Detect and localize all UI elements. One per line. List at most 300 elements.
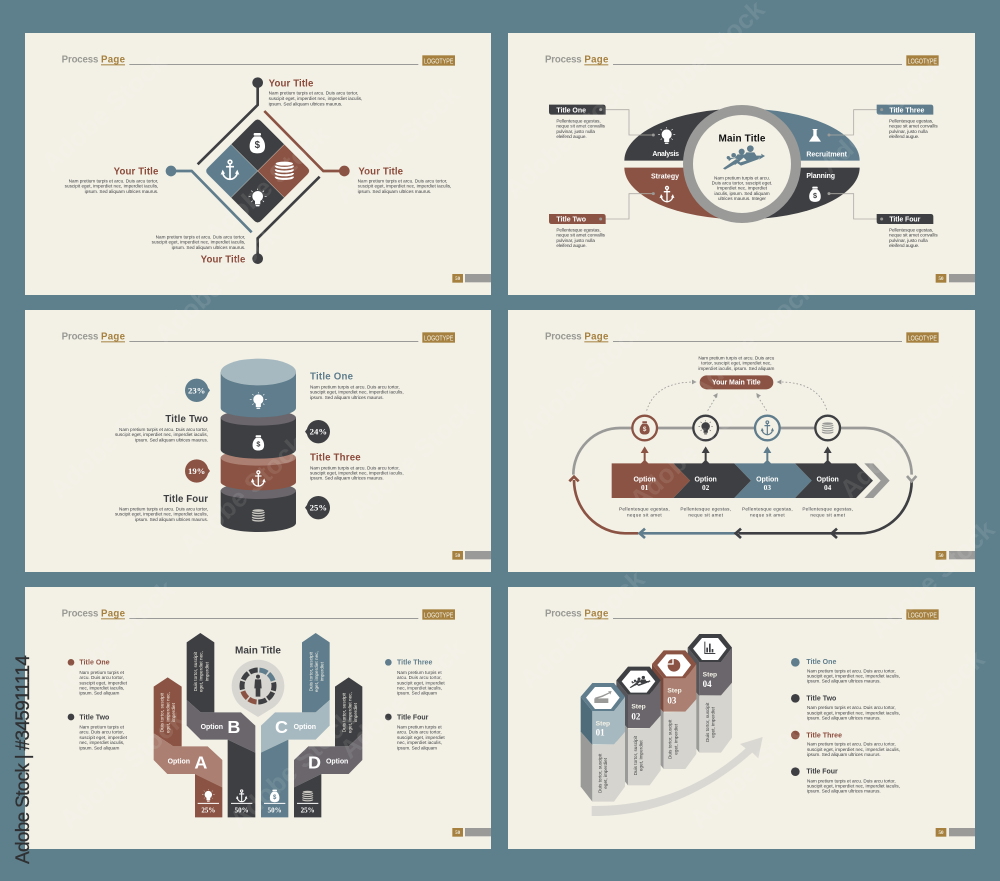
text block: title one: Title One (310, 372, 354, 383)
text block: title two (115, 414, 208, 442)
badge: 23% (185, 379, 210, 402)
label: title two: Title Two (556, 217, 586, 224)
legend: title two: ipsum. Sed aliquam ultrices maurus. (807, 715, 881, 720)
arrow D (294, 677, 362, 817)
diagram: hexagon steps (581, 634, 900, 816)
text block: title three: ipsum. Sed aliquam ultrices maurus. (310, 476, 384, 481)
watermark: Adobe Stock (854, 644, 991, 774)
legend: title four (791, 767, 900, 793)
header: process page: 50 (939, 277, 944, 282)
watermark: Adobe Stock (864, 514, 1000, 644)
center text (712, 175, 772, 201)
step 04 column: Step (703, 671, 717, 678)
legend: title one: Nam pretium turpis et (79, 670, 125, 675)
text block: title two: ipsum. Sed aliquam ultrices maurus. (135, 437, 208, 442)
text block: top: Your Title (269, 79, 314, 90)
watermark: Adobe Stock (334, 634, 471, 764)
header: process page: LOGOTYPE (908, 610, 937, 619)
legend: title two (791, 694, 900, 720)
watermark: Adobe Stock (814, 49, 951, 179)
icon: flask (809, 129, 821, 142)
header: process page: Process (62, 609, 98, 620)
badge: 19%: 19% (188, 466, 205, 476)
connectors (601, 110, 882, 219)
legend: title two: Title Two (806, 696, 836, 703)
panel: diamond four titles (25, 33, 491, 295)
step 01 column (581, 683, 625, 802)
text block: bottom: Nam pretium turpis et arcu. Duis arcu tortor, (156, 235, 245, 240)
label: title four: eleifend augue. (889, 243, 919, 248)
legend: title two: ipsum. Sed aliquam (79, 745, 119, 750)
text block: left (65, 166, 159, 194)
text block: title three (310, 452, 404, 481)
label: title one: pulvinar, justo nulla (556, 129, 595, 134)
step 01 column: 01 (596, 728, 605, 738)
legend: title one: ipsum. Sed aliquam (79, 691, 119, 696)
arrow B: B (227, 717, 240, 737)
step 03 column: eget, imperdiet (673, 723, 678, 755)
watermark: Adobe Stock (624, 384, 761, 514)
legend: title four (385, 714, 445, 750)
legend: title two: Title Two (79, 714, 109, 721)
chevron: option 02: 02 (702, 483, 710, 492)
legend: title one: suscipit eget, imperdiet nec, imperdiet iaculis, (807, 674, 900, 679)
header: process page: LOGOTYPE (424, 610, 453, 619)
text block: title one: ipsum. Sed aliquam ultrices maurus. (310, 395, 384, 400)
option captions: Pellentesque egestas, (742, 506, 793, 511)
legend: title one: ipsum. Sed aliquam ultrices maurus. (807, 679, 881, 684)
column footers: 25% (301, 807, 315, 815)
legend: title four: Title Four (806, 769, 838, 776)
header: process page: LOGOTYPE (424, 56, 453, 65)
header: process page: Page (584, 609, 609, 620)
legend: title two: suscipit eget, imperdiet nec, imperdiet iaculis, (807, 710, 900, 715)
cylinder layer 2 (221, 410, 296, 459)
label: title four: neque sit amet convallis (889, 233, 938, 238)
label: title four: Title Four (889, 217, 921, 224)
watermark: Adobe Stock (36, 47, 173, 177)
step 03 column: Step (667, 688, 682, 695)
step 02 column: Step (631, 704, 646, 711)
pill: main title (700, 375, 773, 389)
legend: title one (68, 659, 128, 696)
arrow A: Duis tortor, suscipit (160, 692, 165, 732)
legend: title four: arcu. Duis arcu tortor, (397, 730, 442, 735)
option captions: Pellentesque egestas, (802, 506, 853, 511)
watermark: Adobe Stock (44, 374, 181, 504)
option captions: neque sit amet (688, 512, 724, 517)
quadrant labels: Strategy (651, 174, 679, 181)
legend: title two: Nam pretium turpis et arcu. Duis arcu tortor, (807, 705, 896, 710)
column footers: 25% (201, 807, 215, 815)
option captions: neque sit amet (810, 512, 846, 517)
icon: money bag (253, 435, 264, 450)
loop: teal bottom (642, 529, 737, 537)
label: title two: pulvinar, justo nulla (556, 238, 595, 243)
text block: bottom: Your Title (201, 255, 246, 266)
watermark: Adobe Stock (834, 374, 971, 504)
arrow A: eget, imperdiet nec, (165, 692, 170, 733)
text block: title two: Title Two (165, 414, 208, 425)
step 04 column: eget, imperdiet (711, 706, 716, 738)
step 01 column: Step (596, 721, 610, 728)
watermark: Adobe Stock (329, 79, 466, 209)
header: process page: Page (101, 332, 126, 343)
arrow D: D (308, 752, 321, 772)
label: title three: pulvinar, justo nulla (889, 129, 928, 134)
watermark: Adobe Stock (199, 119, 336, 249)
text block: title four: Nam pretium turpis et arcu. Duis arcu tortor, (119, 507, 208, 512)
text block: title four (115, 494, 208, 522)
header: process page: Page (101, 55, 126, 66)
header: process page: 50 (455, 554, 461, 559)
chevron: option 04: Option (816, 477, 839, 484)
arrow B (187, 633, 255, 817)
quadrant labels: Analysis (652, 151, 679, 158)
step 02 column: 02 (631, 711, 641, 721)
panel: oval main title (508, 33, 975, 295)
arrow B: eget, imperdiet nec, (199, 651, 204, 692)
cylinder layer 4 (221, 482, 296, 532)
text block: right (358, 166, 451, 194)
badge: 24% (305, 420, 330, 443)
diamond quadrants (206, 119, 309, 223)
step 03 column: 03 (667, 695, 677, 705)
quadrant labels: Planning (806, 173, 835, 180)
text block: title three: Title Three (310, 452, 361, 463)
legend: title one: Title One (806, 659, 836, 666)
chevron: option 04: 04 (824, 483, 832, 492)
badge: 25% (305, 496, 330, 519)
header: process page: LOGOTYPE (908, 56, 937, 65)
watermark: Adobe Stock (149, 219, 286, 349)
icon: light bulb (249, 189, 267, 206)
diagram: diamond (65, 77, 451, 266)
stem arrows (640, 446, 832, 464)
step 02 column: Duis tortor, suscipit (633, 735, 638, 775)
dotted arrows (647, 380, 827, 411)
step 04 column (688, 634, 732, 753)
header: process page: Process (62, 332, 98, 343)
icon: money bag (809, 187, 821, 202)
header: process page (62, 55, 491, 283)
main title: Main Title (718, 133, 766, 144)
legend: title four: ipsum. Sed aliquam ultrices maurus. (807, 788, 881, 793)
circle: coins (815, 416, 840, 440)
intro text: tortor, suscipit eget, imperdiet nec, (701, 361, 771, 366)
label: title two: Pellentesque egestas, (556, 228, 601, 233)
legend: title one: Title One (79, 660, 110, 667)
header: process page: Page (584, 332, 609, 343)
connector: bottom (252, 177, 320, 264)
label: title one: Pellentesque egestas, (556, 119, 601, 124)
arrow C: Option (294, 724, 316, 731)
step 02 column: eget, imperdiet (639, 740, 644, 771)
icon: anchor (660, 186, 674, 202)
legend: title four: Title Four (397, 714, 429, 721)
icon: people with arrow (723, 145, 765, 170)
loop: grey top (573, 428, 912, 475)
connector: left (166, 166, 252, 232)
label: title three: eleifend augue. (889, 134, 919, 139)
text block: title four: suscipit eget, imperdiet nec, imperdiet iaculis, (115, 512, 208, 517)
icon: coins (276, 162, 293, 179)
text block: title two: suscipit eget, imperdiet nec, imperdiet iaculis, (115, 432, 208, 437)
icon: light bulb (250, 392, 267, 409)
step 04 column: Duis tortor, suscipit (705, 702, 710, 742)
option captions: neque sit amet (750, 512, 785, 517)
arrow C: C (275, 717, 288, 737)
watermark: Adobe Stock (499, 74, 636, 204)
text block: right: Your Title (358, 166, 404, 177)
legend: title four: suscipit eget, imperdiet (397, 735, 445, 740)
text block: title one: Nam pretium turpis et arcu. Duis arcu tortor, (310, 385, 400, 390)
growth arrow (592, 737, 763, 816)
quadrant labels (651, 151, 848, 181)
legend: title one: arcu. Duis arcu tortor, (79, 675, 124, 680)
panel: process loop (508, 310, 975, 572)
legend: title three: Title Three (806, 732, 842, 739)
legend: title three: suscipit eget, imperdiet nec, imperdiet iaculis, (807, 747, 900, 752)
arrow C: Duis tortor, suscipit (308, 651, 313, 691)
chevron: option 03 (734, 463, 812, 498)
legend: title two: nec, imperdiet iaculis, (79, 740, 124, 745)
arrow A: A (194, 752, 207, 772)
diagram: process loop (569, 356, 916, 538)
label: title three: Pellentesque egestas, (889, 119, 933, 124)
watermark: Adobe Stock (224, 704, 361, 834)
header: process page (545, 609, 975, 837)
legend: title one (791, 658, 900, 684)
center text: Duis arcu tortor, suscipit eget. (712, 180, 772, 185)
stock id label: Adobe Stock | #345911114 (13, 655, 34, 864)
text block: bottom (152, 235, 246, 266)
arrow B: imperdiet (204, 661, 209, 681)
legend: title three: arcu. Duis arcu tortor, (397, 675, 442, 680)
text block: title two: Nam pretium turpis et arcu. Duis arcu tortor, (119, 427, 208, 432)
icon: coins (252, 509, 264, 521)
header: process page: 50 (939, 554, 944, 559)
arrow B: Duis tortor, suscipit (193, 651, 198, 691)
arrow D: eget, imperdiet nec, (347, 692, 352, 733)
panel: hexagon steps (508, 587, 975, 849)
arrow C (261, 633, 330, 817)
label: title two: eleifend augue. (556, 243, 587, 248)
header: process page: LOGOTYPE (424, 333, 453, 342)
label: title four: pulvinar, justo nulla (889, 238, 928, 243)
header: process page: LOGOTYPE (908, 333, 937, 342)
arrow D: Option (326, 759, 348, 766)
text block: right: ipsum. Sed aliquam ultrices maurus. (358, 189, 431, 194)
watermark: Adobe Stock (174, 429, 311, 559)
watermark: Adobe Stock (514, 564, 651, 694)
chevron: option 01: 01 (641, 483, 649, 492)
text block: top (269, 79, 362, 106)
step 01 column: Duis tortor, suscipit (597, 753, 602, 793)
legend: title four: Nam pretium turpis et (397, 725, 442, 730)
header: process page: Process (62, 55, 98, 66)
label: title two: neque sit amet convallis (556, 233, 606, 238)
cylinder layer 3 (221, 450, 296, 490)
step 03 column (652, 650, 696, 769)
text block: top: Nam pretium turpis et arcu. Duis arcu tortor, (269, 91, 358, 96)
panel: folded arrows (25, 587, 491, 849)
label: title three: Title Three (889, 107, 924, 114)
connector dots (652, 133, 830, 195)
label: title one (549, 105, 606, 139)
diagram: folded arrows (68, 633, 445, 817)
center text: Nam pretium turpis et arcu. (714, 175, 770, 180)
legend: title three: ipsum. Sed aliquam (397, 691, 437, 696)
header: process page: 50 (939, 831, 944, 836)
arrow D: Duis tortor, suscipit (342, 692, 347, 732)
label: title one: neque sit amet convallis (556, 124, 606, 129)
chevron: option 02: Option (694, 477, 717, 484)
oval quadrants (624, 109, 860, 219)
badge: 25%: 25% (310, 503, 327, 513)
text block: left: Your Title (114, 166, 159, 177)
header: process page: Page (101, 609, 126, 620)
quadrant labels: Recruitment (806, 152, 848, 159)
cylinder layer 1 (221, 359, 296, 417)
text block: title three: Nam pretium turpis et arcu. Duis arcu tortor, (310, 465, 400, 470)
header: process page (545, 55, 975, 283)
text block: right: suscipit eget, imperdiet nec, imperdiet iaculis, (358, 184, 451, 189)
column footers: 50% (268, 807, 282, 815)
badge: 24%: 24% (310, 427, 327, 437)
diagram: cylinder (115, 359, 404, 532)
badge: 19% (185, 459, 210, 483)
header: process page: 50 (455, 277, 461, 282)
legend: title one: suscipit eget, imperdiet (79, 680, 128, 685)
legend: title two: suscipit eget, imperdiet (79, 735, 128, 740)
arrow A: Option (168, 758, 190, 765)
center text: iaculis, ipsum. Sed aliquam (714, 191, 770, 196)
chevron: option 02 (673, 463, 751, 498)
text block: right: Nam pretium turpis et arcu. Duis arcu tortor, (358, 179, 447, 184)
header: process page (62, 332, 491, 560)
chevron: option 01 (612, 463, 690, 498)
connector: top (198, 77, 263, 164)
loop: dark right (738, 481, 912, 533)
label: title one: Title One (556, 107, 586, 114)
chevron: option 01: Option (633, 477, 656, 484)
column footers: 50% (235, 807, 249, 815)
pin with person (232, 660, 284, 717)
circle: money bag (632, 416, 657, 440)
legend: title four: suscipit eget, imperdiet nec, imperdiet iaculis, (807, 783, 900, 788)
option captions: neque sit amet (627, 512, 662, 517)
diagram: oval (549, 105, 938, 248)
intro text (698, 356, 775, 371)
icon: anchor (221, 160, 239, 179)
label: title four (877, 214, 938, 248)
step 02 column (616, 667, 661, 785)
label: title two (549, 214, 606, 248)
watermark: Adobe Stock (54, 704, 191, 834)
text block: top: ipsum. Sed aliquam ultrices maurus. (269, 101, 342, 106)
watermark: Adobe Stock (684, 704, 821, 834)
legend: title three (791, 731, 900, 757)
legend: title three: Nam pretium turpis et arcu. Duis arcu tortor, (807, 742, 896, 747)
header: process page (62, 609, 491, 837)
column footers (198, 789, 318, 815)
circle: light bulb (693, 416, 718, 440)
header: process page: Process (545, 55, 582, 66)
legend: title four: Nam pretium turpis et arcu. Duis arcu tortor, (807, 778, 896, 783)
step 03 column: Duis tortor, suscipit (668, 719, 673, 759)
watermark: Adobe Stock (44, 574, 181, 704)
watermark: Adobe Stock (684, 274, 821, 404)
legend: title two: Nam pretium turpis et (79, 725, 125, 730)
chevron: option 03: 03 (764, 483, 771, 492)
legend: title two (68, 714, 128, 750)
legend: title one: Nam pretium turpis et arcu. Duis arcu tortor, (807, 668, 896, 673)
badge: 23%: 23% (188, 385, 205, 395)
arrow A: imperdiet (171, 702, 176, 722)
legend: title three: ipsum. Sed aliquam ultrices maurus. (807, 752, 881, 757)
loop: brown left (574, 480, 638, 533)
arrow C: imperdiet (320, 661, 325, 681)
intro text: imperdiet iaculis, ipsum. Sed aliquam (698, 366, 774, 371)
legend: title four: ipsum. Sed aliquam (397, 745, 437, 750)
header: process page: Process (545, 609, 582, 620)
icon: anchor (251, 471, 266, 486)
legend: title four: nec, imperdiet iaculis, (397, 740, 442, 745)
arrow A (154, 677, 222, 817)
header: process page: 50 (455, 831, 461, 836)
step 01 column: eget, imperdiet (603, 757, 608, 789)
label: title three (877, 105, 938, 139)
text block: bottom: suscipit eget, imperdiet nec, imperdiet iaculis, (152, 240, 245, 245)
loop arrowheads (569, 476, 916, 538)
text block: title four: Title Four (163, 494, 208, 505)
text block: top: suscipit eget, imperdiet nec, imperdiet iaculis, (269, 96, 362, 101)
legend: title three: Nam pretium turpis et (397, 670, 442, 675)
label: title three: neque sit amet convallis (889, 124, 938, 129)
legend: title one: nec, imperdiet iaculis, (79, 686, 124, 691)
text block: left: suscipit eget, imperdiet nec, imperdiet iaculis, (65, 184, 158, 189)
option captions: Pellentesque egestas, (619, 506, 670, 511)
text block: title three: suscipit eget, imperdiet nec, imperdiet iaculis, (310, 470, 404, 475)
chevron: option 03: Option (756, 477, 778, 484)
header: process page: Page (584, 55, 609, 66)
option captions: Pellentesque egestas, (680, 506, 731, 511)
text block: title one (310, 372, 404, 400)
icon: money bag (250, 133, 265, 153)
text block: left: ipsum. Sed aliquam ultrices maurus. (85, 189, 158, 194)
label: title one: eleifend augue. (556, 134, 587, 139)
center text: Imperdiet nec, imperdiet (717, 186, 768, 191)
arrow B: Option (201, 724, 223, 731)
center text: ultrices maurus. Integer (718, 196, 766, 201)
circle: anchor (755, 416, 780, 440)
legend: title three (385, 659, 445, 696)
pill: main title: Your Main Title (712, 380, 761, 387)
header: process page (545, 332, 975, 560)
header: process page: Process (545, 332, 582, 343)
text block: title four: ipsum. Sed aliquam ultrices maurus. (135, 517, 208, 522)
option captions (619, 506, 853, 517)
chevron: option 04 (795, 463, 873, 498)
watermark: Adobe Stock (514, 314, 651, 444)
legend: title three: suscipit eget, imperdiet (397, 680, 445, 685)
icon: light bulb (658, 127, 675, 144)
connector: right (264, 111, 350, 176)
text block: left: Nam pretium turpis et arcu. Duis arcu tortor, (69, 179, 158, 184)
text block: title one: suscipit eget, imperdiet nec, imperdiet iaculis, (310, 390, 404, 395)
intro text: Nam pretium turpis et arcu. Duis arcu (698, 356, 775, 361)
